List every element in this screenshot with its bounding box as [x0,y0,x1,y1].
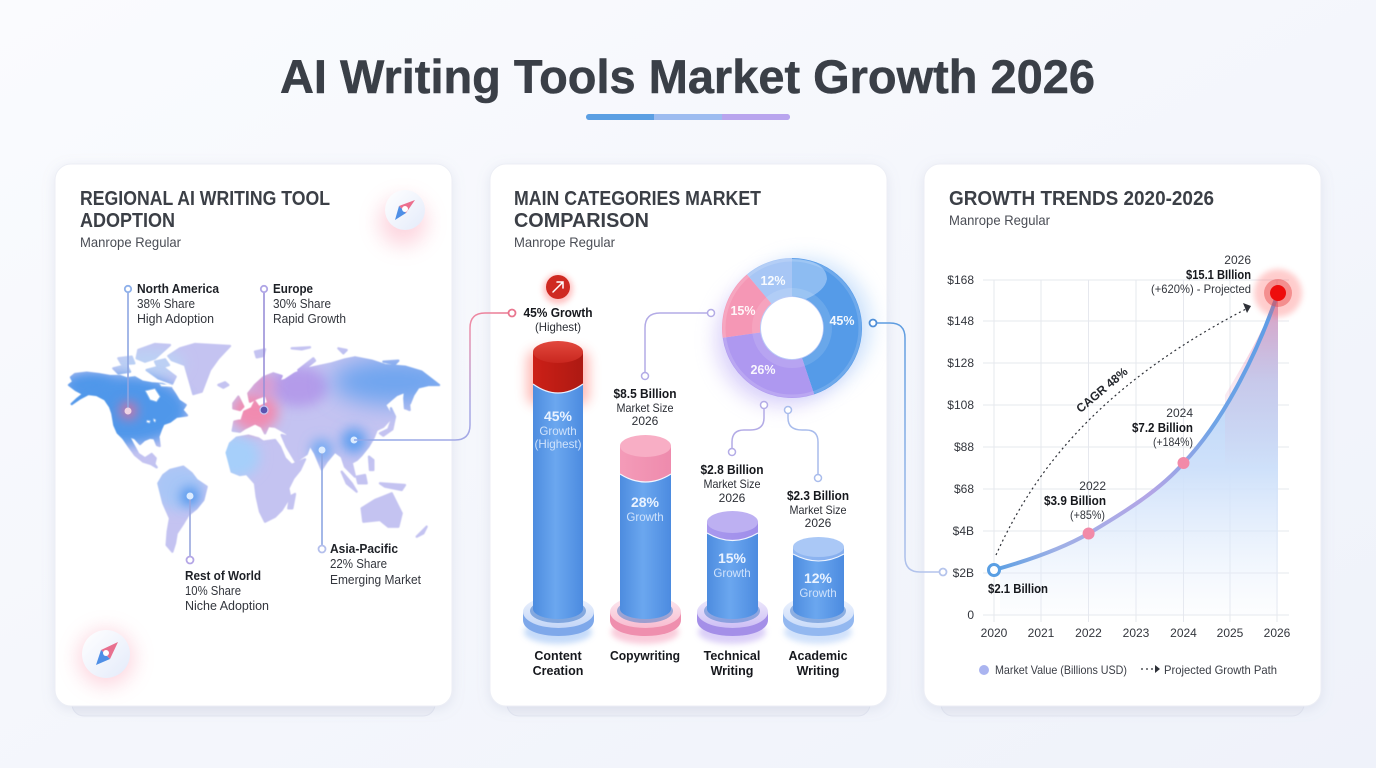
panel: growth trends [924,164,1321,716]
label: Europe: Rapid Growth [273,312,346,326]
x axis: 2022 [1075,626,1102,640]
bar: content creation: Creation [533,664,583,678]
bar: technical writing: Market Size [704,477,761,491]
world map [67,342,441,554]
bar: copywriting: 2026 [632,414,659,428]
bar: academic writing: 12% [804,570,833,586]
x axis: 2023 [1123,626,1150,640]
donut chart: 26% [750,363,776,377]
x axis: 2026 [1264,626,1291,640]
icon: compass bottom [78,630,134,686]
bar: copywriting: Growth [626,511,664,524]
heading: regional: REGIONAL AI WRITING TOOL [80,188,330,210]
bar: technical writing: Technical [704,649,760,663]
label: Rest of World: Rest of World [185,569,261,583]
legend [979,663,1277,677]
bar: copywriting: Market Size [616,401,674,415]
label: Asia-Pacific: 22% Share [330,557,387,571]
label: Content [534,649,582,663]
bar: technical writing: Growth [713,567,751,580]
data points [988,269,1302,576]
label: Europe: 30% Share [273,297,331,311]
y axis: $4B [953,524,974,538]
y axis: $2B [953,566,974,580]
callout: 2020: $2.1 Billion [988,582,1048,596]
y axis: $88 [954,440,974,454]
heading line 2: COMPARISON [514,210,649,232]
subtitle: Manrope Regular [514,234,615,250]
heading: growth: GROWTH TRENDS 2020-2026 [949,188,1214,210]
leader lines [128,293,322,556]
bar: content creation: 45% [544,408,573,424]
callout: 2024: 2024 [1166,406,1193,420]
bar: academic writing: Growth [799,587,837,600]
title: AI Writing Tools Market Growth 2026 [280,50,1095,103]
value: technical: $2.8 Billion [700,463,764,477]
legend: Projected Growth Path [1164,663,1277,677]
connector: map to content creation [354,310,516,440]
bar: technical writing: Writing [711,664,753,678]
callout: 2026: $15.1 BIllion [1186,268,1251,282]
connector: donut to academic [784,406,822,482]
area under curve [1000,293,1278,615]
curve [994,293,1278,570]
label: North America: 38% Share [137,297,195,311]
bar: copywriting: 28% [631,494,660,510]
bar: content creation: (Highest) [534,438,582,451]
callout: 2022: 2022 [1079,479,1106,493]
x axis: 2020 [981,626,1008,640]
x axis [981,626,1291,640]
donut chart: 45% [829,314,855,328]
label: Rest of World: Niche Adoption [185,599,269,613]
bar: copywriting: Copywriting [610,649,680,663]
label: North America: High Adoption [137,312,214,326]
y axis: 0 [967,608,974,622]
legend: Market Value (Billions USD) [995,663,1127,677]
bar: academic writing: Market Size [790,503,847,517]
connector: donut to growth chart [870,320,946,576]
dotted projection arrow [996,303,1251,555]
bar: content creation: Growth [539,425,577,438]
panel: categories [490,164,887,716]
growth label [524,306,592,334]
heading: categories: MAIN CATEGORIES MARKET [514,188,761,210]
subtitle: Manrope Regular [949,212,1050,228]
label: Rest of World [185,569,269,613]
CAGR label: CAGR 48% [1073,364,1131,416]
y axis: $148 [947,314,974,328]
callout: 2022 [1044,479,1106,522]
heading line 2: ADOPTION [80,210,175,232]
bar: academic writing: Academic [788,649,848,663]
area pink edge [1225,293,1278,470]
bar: content creation [523,341,594,678]
label: Asia-Pacific [330,542,421,587]
value: copywriting: $8.5 Billion [614,387,676,401]
donut chart: 12% [760,274,786,288]
label: Asia-Pacific: Emerging Market [330,573,421,587]
icon: growth badge [543,274,573,304]
callout: 2022: $3.9 Billion [1044,494,1106,508]
y axis: $68 [954,482,974,496]
title underline [586,114,790,120]
y axis: $168 [947,273,974,287]
callout: 2022: (+85%) [1070,508,1105,522]
growth label: (Highest) [535,320,581,334]
y axis: $108 [947,398,974,412]
x axis: 2021 [1028,626,1055,640]
label: North America [137,282,220,326]
subtitle: Manrope Regular [80,234,181,250]
callout: 2024: $7.2 Billion [1132,421,1193,435]
icon: compass top [379,190,427,246]
bar: academic writing: 2026 [805,516,832,530]
y axis: $128 [947,356,974,370]
callout: 2026 [1151,253,1251,296]
growth label: 45% Growth [524,306,592,320]
value: academic: $2.3 Billion [787,489,849,503]
bar: academic writing [783,489,854,678]
bar: technical writing [697,463,768,678]
bar: technical writing: 15% [718,550,747,566]
donut chart: 15% [730,304,756,318]
bar: copywriting [610,387,681,663]
label: Europe [273,282,346,326]
callout: 2024: (+184%) [1153,435,1193,449]
y axis [947,273,974,622]
callout: 2026: (+620%) - Projected [1151,282,1251,296]
bar: academic writing: Writing [797,664,839,678]
label: North America: North America [137,282,220,296]
donut chart [716,258,871,406]
x axis: 2025 [1217,626,1244,640]
label: Rest of World: 10% Share [185,584,241,598]
markers [124,286,358,564]
callout: 2026: 2026 [1224,253,1251,267]
panel: regional adoption [55,164,458,716]
x axis: 2024 [1170,626,1197,640]
callout: 2024 [1132,406,1193,449]
label: Asia-Pacific: Asia-Pacific [330,542,398,556]
connector: donut to technical [728,402,768,456]
bar: technical writing: 2026 [719,491,746,505]
line chart [947,253,1302,640]
connector: donut to copywriting [642,310,714,380]
label: Europe: Europe [273,282,313,296]
